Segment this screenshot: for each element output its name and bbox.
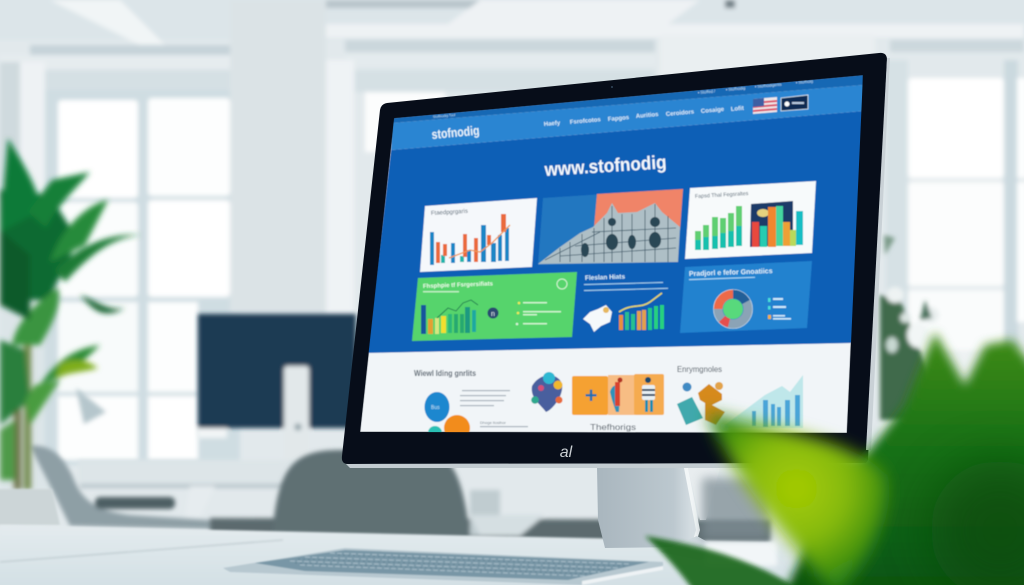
card: bar chart [420, 198, 537, 272]
card: green stats [412, 272, 577, 341]
navigation menu: Auritios [636, 112, 659, 120]
section: left text and bubbles: Wiewl Iding gnrlits [414, 369, 476, 378]
bezel logo: al [560, 444, 573, 461]
donut chart [718, 294, 748, 324]
orange illustration panels: + [585, 383, 597, 408]
flag [753, 97, 777, 114]
navigation menu: Lofit [731, 106, 744, 113]
background office chairs [30, 446, 770, 545]
card: bar chart: Ftaedpgrgaris [431, 209, 468, 217]
section: left text and bubbles [414, 370, 528, 432]
navigation menu: Fapgos [608, 115, 630, 123]
navigation menu: Fsrofcotos [570, 117, 602, 126]
card: building image [538, 189, 683, 265]
section: right illustration: Enrymgnoles [677, 365, 722, 374]
caption: Thefhorigs [590, 422, 636, 432]
balloon illustration [531, 372, 562, 412]
map shape [583, 305, 612, 332]
panel: map and growth chart [583, 274, 668, 332]
top strip: ▪ Stoffed / [698, 88, 716, 95]
top strip [393, 75, 863, 123]
main headline: www.stofnodig [543, 152, 667, 181]
panel: map and growth chart: Fleslan Hiats [585, 274, 626, 282]
monitor bezel [342, 53, 890, 468]
card: donut statistics [680, 261, 812, 333]
site logo: stofnodig [431, 123, 480, 142]
card: donut statistics: Pradjorl e fefor Gnoatiics [689, 268, 773, 278]
website on monitor screen [360, 75, 863, 441]
potted plant on the left [0, 138, 141, 490]
top strip: Stoffnodig Tool [433, 113, 456, 119]
main blue area [368, 111, 863, 353]
dark header button [781, 95, 808, 111]
top strip: ▪ Stofhoig [796, 78, 813, 85]
card: green stats: Fhsphpie tf Fsrgersifiats [423, 281, 494, 290]
navigation menu: Ceroidors [666, 109, 695, 118]
camera dot [611, 86, 613, 88]
plant pot [0, 489, 60, 525]
card: green stats: n [491, 311, 495, 318]
foreground plant leaves [645, 332, 1024, 585]
navigation menu: Cosaige [701, 107, 725, 115]
background desk and dark monitor [76, 314, 356, 522]
top strip: ▪ Stofhodig [726, 85, 745, 92]
header band [391, 85, 863, 150]
section: right illustration [677, 365, 803, 428]
orange illustration panels [572, 374, 664, 415]
navigation menu: Haefy [544, 120, 561, 128]
monitor stand [597, 468, 777, 566]
top strip: ▪ Stofhodigenis [755, 82, 782, 89]
section: left text and bubbles: Dhoge ltosihor [480, 420, 506, 425]
foreground desk [0, 525, 1024, 585]
card: mixed bar charts [685, 181, 816, 259]
card: mixed bar charts: Fapsd Thal Fegsraltes [695, 191, 749, 200]
keyboard [223, 548, 663, 585]
blurred plant behind monitor [880, 235, 945, 420]
navigation menu [544, 106, 744, 128]
section: left text and bubbles: Bus [431, 405, 440, 411]
